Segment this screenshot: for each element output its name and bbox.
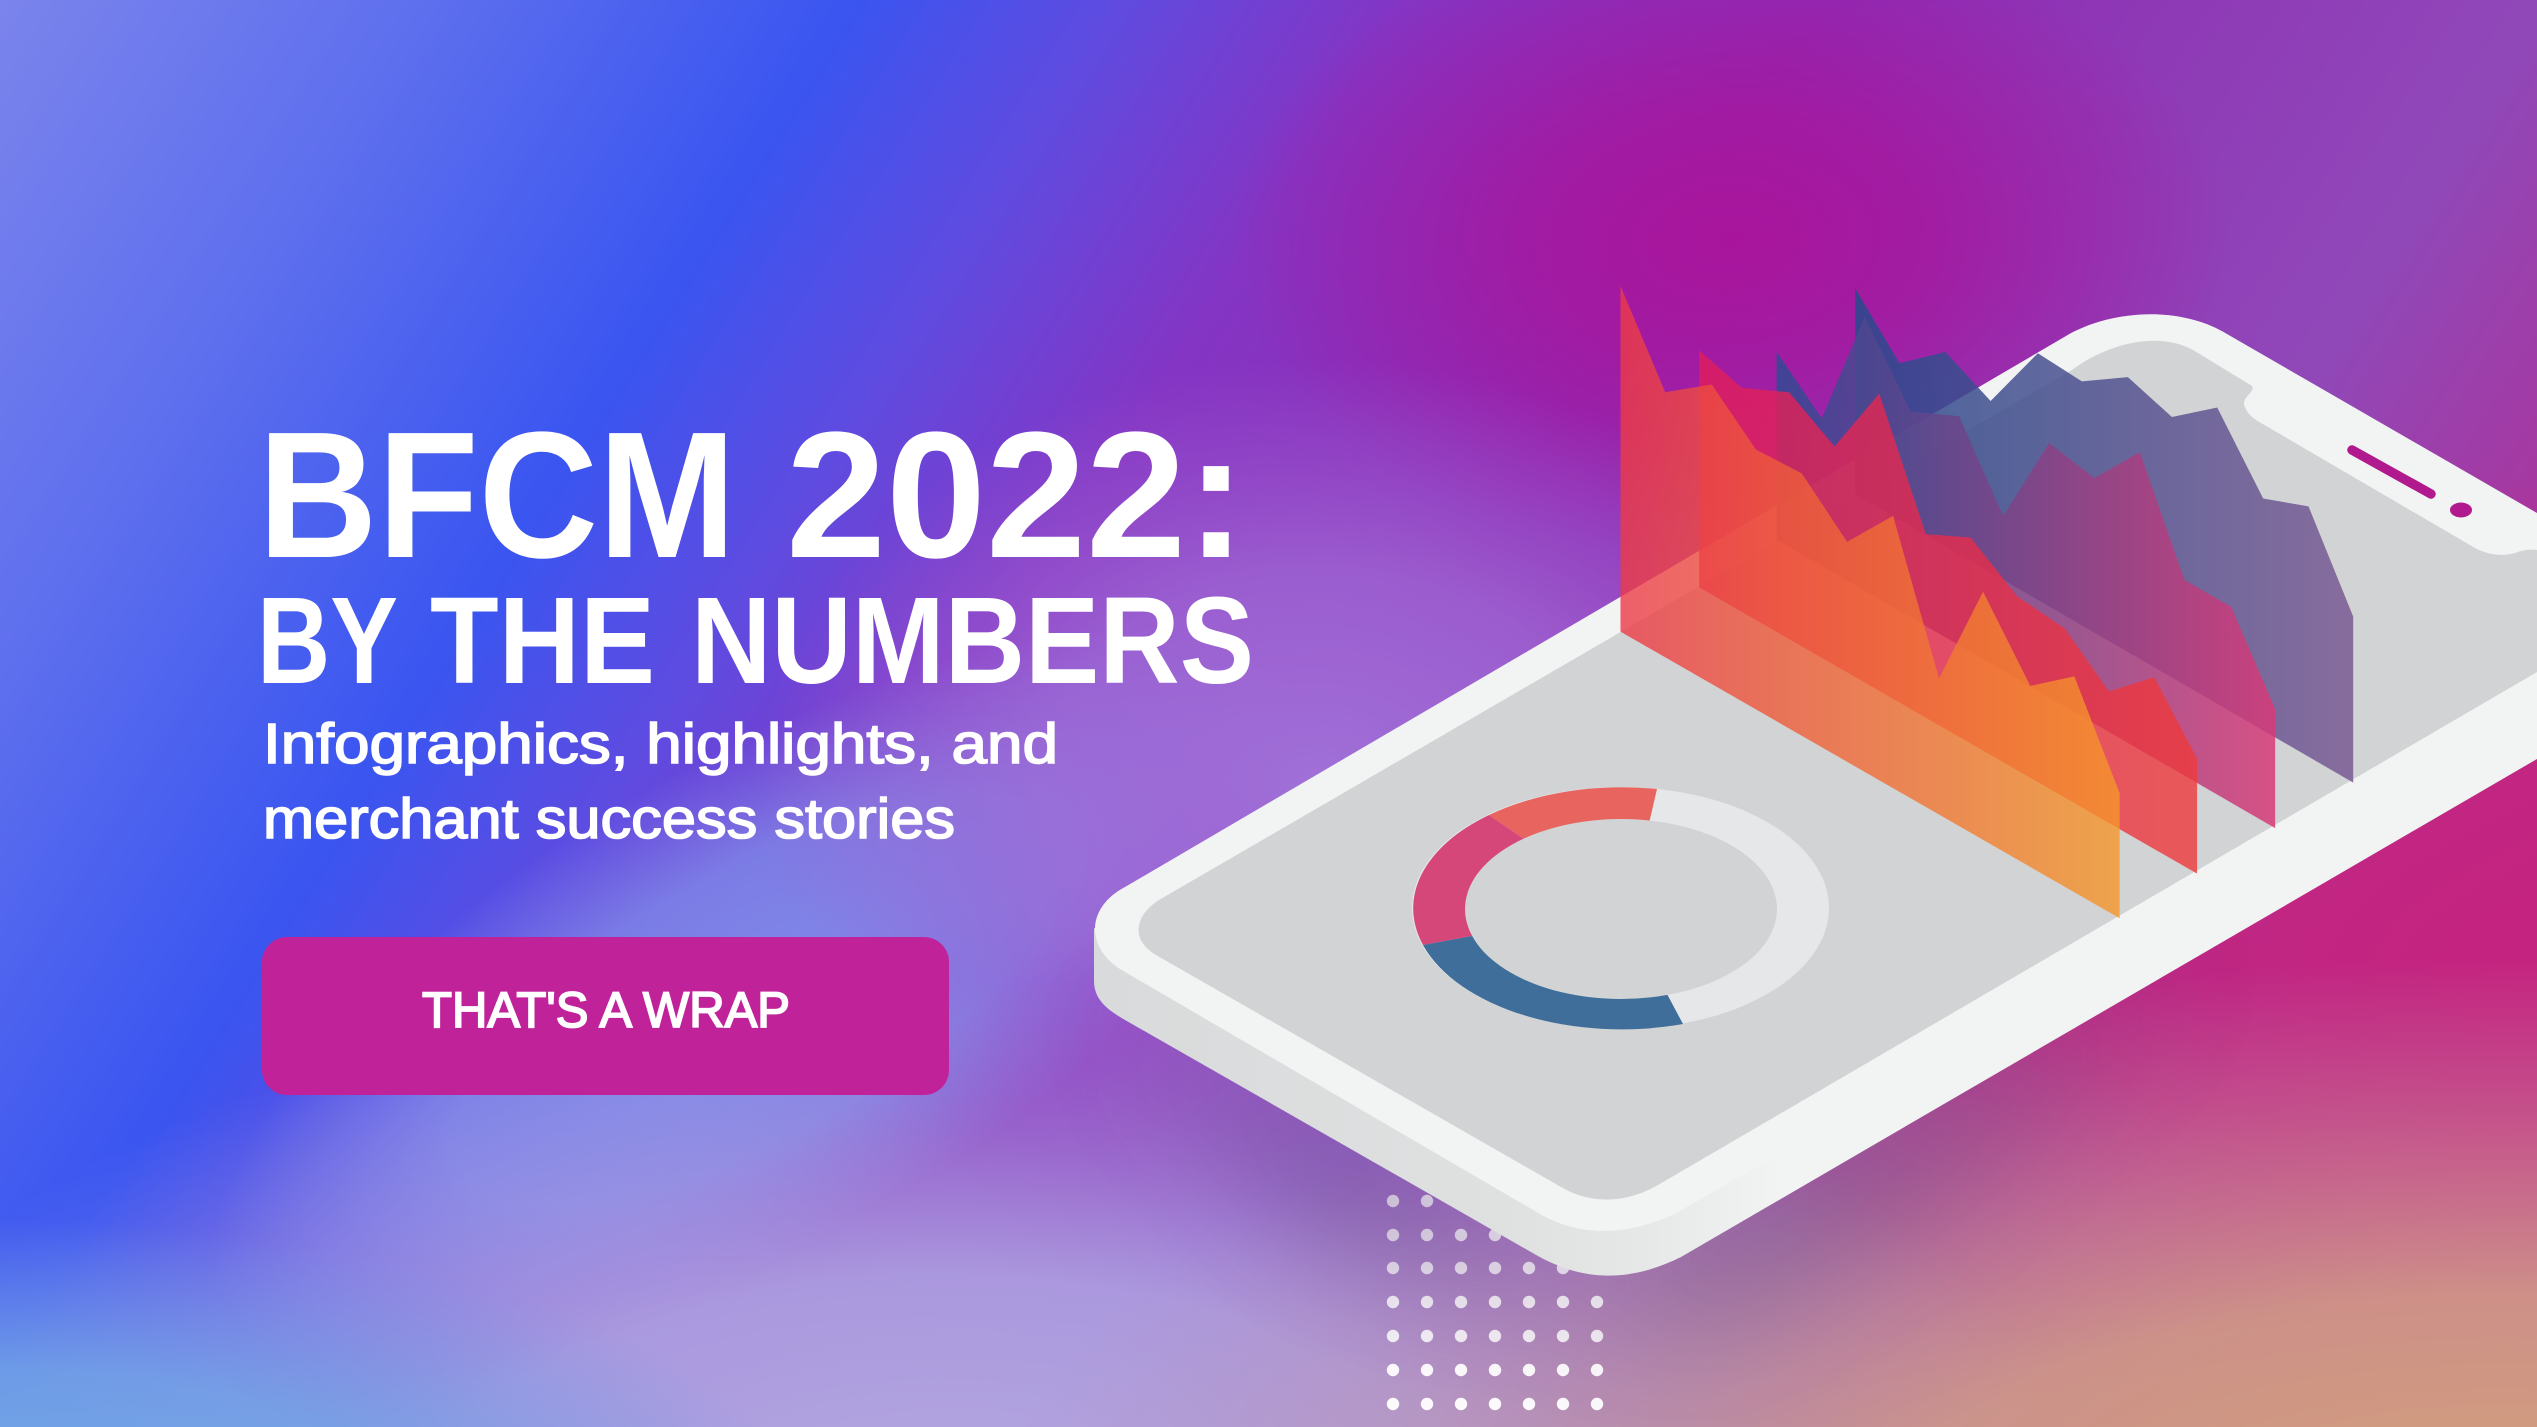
phone speaker [2352,450,2431,494]
button [262,937,949,1095]
area chart 4 (back) [1855,288,2353,783]
subtitle [263,712,1058,851]
phone screen [1139,341,2537,1200]
dot grid [1387,1195,1603,1410]
area chart 1 (front) [1620,286,2120,918]
title line 2: BY [257,573,398,710]
phone illustration [1094,314,2537,1276]
title line 1: 2022: [786,395,1246,596]
subtitle: Infographics, highlights, and [263,712,1058,776]
phone camera [2450,502,2472,518]
layered area charts [1620,286,2353,918]
phone top face [1095,314,2537,1231]
area chart 3 [1777,316,2275,828]
subtitle: merchant success stories [263,787,955,851]
title line 2 [257,573,1254,710]
title line 1: BFCM [258,395,736,596]
button label: THAT'S A WRAP [422,982,790,1038]
heading [257,395,1254,710]
donut chart [1412,787,1829,1029]
phone side wall [1094,700,2537,1276]
title line 2: THE [430,573,655,710]
title line 2: NUMBERS [691,573,1254,710]
phone shadow [1110,950,2200,1320]
area chart 2 [1699,350,2197,874]
title line 1 [258,395,1246,596]
